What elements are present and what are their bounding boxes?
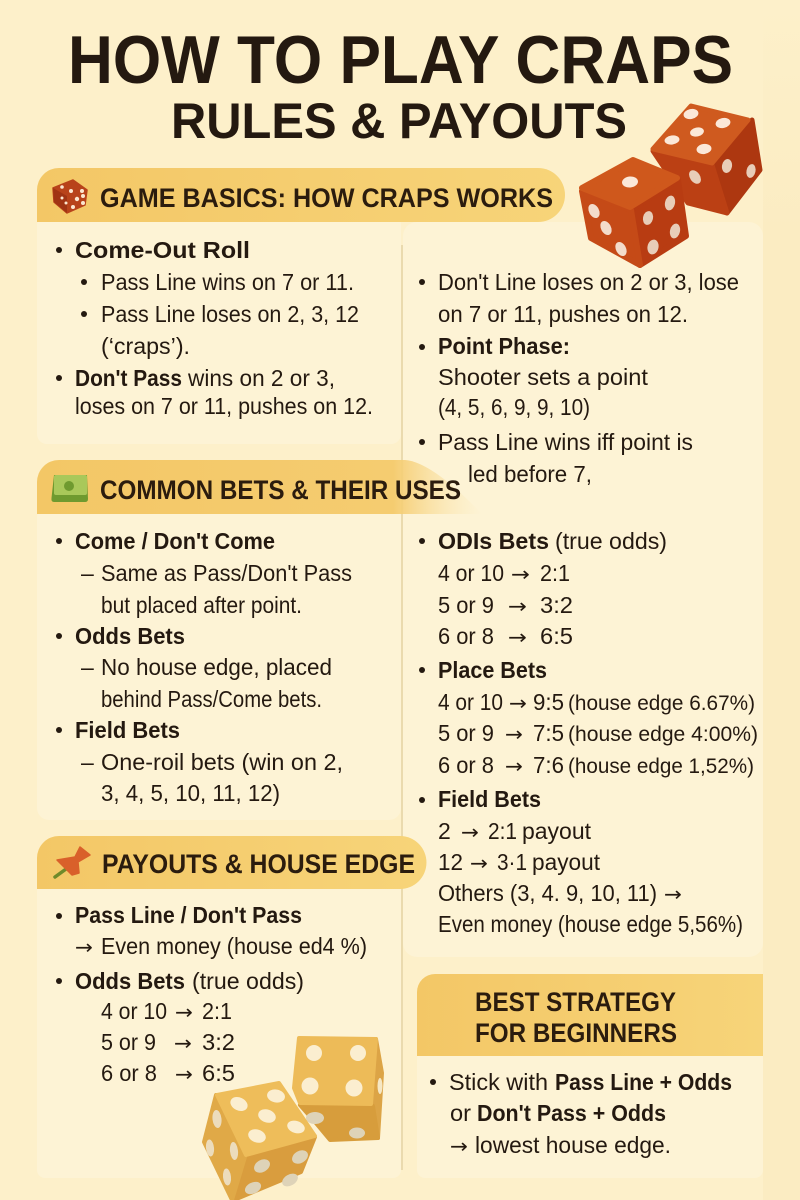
panel: common bets left column: – (81, 749, 94, 775)
header: common bets (37, 460, 482, 514)
panel: right column: 12 (438, 849, 463, 875)
strategy heading: BEST STRATEGY (475, 987, 676, 1017)
panel: game basics left column (37, 215, 401, 444)
icon: push pin (55, 847, 90, 877)
panel: right column: (house edge 1,52%) (568, 755, 754, 778)
panel: right column: Others (3, 4. 9, 10, 11) (438, 880, 657, 906)
icon: money stack (51, 475, 88, 502)
panel: right column: 6 or 8 (438, 752, 494, 778)
panel: payouts left column: → (174, 1031, 192, 1055)
panel: right column: Pass Line wins iff point is (438, 429, 693, 455)
panel: common bets left column: Same as Pass/Don't Pass (101, 560, 352, 586)
panel: payouts left column: 6 or 8 (101, 1060, 157, 1086)
panel: common bets left column: One-roil bets (win on 2, (101, 749, 343, 775)
panel: game basics left column: (‘craps’). (101, 333, 190, 359)
panel: right column: → (508, 625, 527, 649)
column divider (401, 245, 403, 1170)
panel: common bets left column: – (81, 560, 94, 586)
strategy text: Don't Pass + Odds (477, 1100, 666, 1126)
header: game basics: GAME BASICS: HOW CRAPS WORKS (100, 183, 553, 213)
panel: right column: 5 or 9 (438, 720, 494, 746)
panel: right column: 2 (438, 818, 451, 844)
panel: right column: → (505, 754, 523, 778)
header: payouts and house edge (37, 836, 426, 889)
panel: payouts left column: 3:2 (202, 1029, 235, 1055)
panel: right column: → (511, 562, 530, 586)
strategy text: lowest house edge. (475, 1132, 671, 1158)
panel: common bets left column: but placed after point. (101, 592, 302, 618)
panel: payouts left column: 5 or 9 (101, 1029, 156, 1055)
panel: right column: 2:1 (540, 560, 570, 586)
panel: common bets left column: No house edge, placed (101, 654, 332, 680)
panel: payouts left column: Pass Line / Don't Pass (75, 902, 302, 928)
panel: game basics left column: wins on 2 or 3, (187, 365, 335, 391)
red rear die (653, 106, 760, 213)
panel: right column: 4 or 10 (438, 689, 503, 715)
panel: game basics left column: Come-Out Roll (75, 237, 250, 263)
icon: gold dice (204, 1038, 382, 1200)
panel: right column: 7:6 (533, 752, 564, 778)
strategy heading: FOR BEGINNERS (475, 1018, 677, 1048)
panel: right column: ODIs Bets (438, 528, 549, 554)
panel: payouts left column: Odds Bets (75, 968, 185, 994)
panel: game basics left column: loses on 7 or 11, pushes on 12. (75, 393, 373, 419)
panel: right column: 7:5 (533, 720, 564, 746)
header: common bets: COMMON BETS & THEIR USES (100, 475, 461, 505)
title: RULES & PAYOUTS (171, 93, 627, 149)
strategy text (430, 1069, 732, 1158)
panel: game basics left column: Pass Line wins on 7 or 11. (101, 269, 354, 295)
panel: right column: 3·1 (497, 849, 527, 875)
title (68, 22, 733, 149)
panel: game basics left column: Pass Line loses on 2, 3, 12 (101, 301, 359, 327)
panel: right column: (house edge 4:00%) (568, 723, 758, 746)
panel: payouts left column: 6:5 (202, 1060, 235, 1086)
header: game basics (37, 168, 565, 222)
gold front die (204, 1083, 315, 1200)
panel: right column: → (508, 594, 527, 618)
panel: right column: 4 or 10 (438, 560, 504, 586)
panel: right column: (4, 5, 6, 9, 9, 10) (438, 394, 590, 420)
panel: right column: Place Bets (438, 657, 547, 683)
panel: best strategy for beginners (417, 974, 763, 1178)
panel: right column: Field Bets (438, 786, 541, 812)
red front die (582, 160, 686, 265)
panel: right column: payout (532, 849, 601, 875)
panel: right column: 2:1 (488, 818, 517, 844)
panel: payouts left column: → (175, 1062, 193, 1086)
panel: common bets left column: behind Pass/Come bets. (101, 686, 322, 712)
panel: right column (403, 222, 763, 957)
panel: right column: on 7 or 11, pushes on 12. (438, 301, 688, 327)
strategy text: Pass Line + Odds (555, 1069, 732, 1095)
panel: right column: (true odds) (555, 528, 667, 554)
icon: small die (53, 180, 87, 213)
panel: game basics left column: Don't Pass (75, 365, 182, 391)
panel: right column: Don't Line loses on 2 or 3, lose (438, 269, 739, 295)
panel: common bets left column: Field Bets (75, 717, 180, 743)
panel: payouts left column: → (75, 935, 93, 959)
panel: payouts left column: Even money (house ed4 %) (101, 933, 367, 959)
panel: common bets left column (37, 505, 401, 820)
panel: right column: 9:5 (533, 689, 564, 715)
panel: common bets left column: – (81, 654, 94, 680)
icon: red dice (582, 106, 760, 265)
panel: right column: → (470, 851, 488, 875)
panel: right column: 5 or 9 (438, 592, 494, 618)
panel: right column: → (505, 722, 523, 746)
strategy text: Stick with (449, 1069, 548, 1095)
panel: right column: 3:2 (540, 592, 573, 618)
panel: payouts left column: → (175, 1000, 193, 1024)
panel: right column: 6:5 (540, 623, 573, 649)
panel: right column: → (509, 691, 527, 715)
panel: common bets left column: Come / Don't Come (75, 528, 275, 554)
title: HOW TO PLAY CRAPS (68, 22, 733, 98)
panel: right column: Shooter sets a point (438, 364, 649, 390)
panel: right column: 6 or 8 (438, 623, 494, 649)
panel: payouts left column (37, 880, 401, 1178)
panel: right column: Point Phase: (438, 333, 570, 359)
panel: payouts left column: (true odds) (192, 968, 304, 994)
panel: common bets left column: Odds Bets (75, 623, 185, 649)
gold rear die (294, 1038, 382, 1140)
panel: right column: payout (522, 818, 592, 844)
panel: right column: → (461, 820, 479, 844)
strategy heading (475, 987, 677, 1048)
header: payouts and house edge: PAYOUTS & HOUSE EDGE (102, 849, 415, 879)
panel: right column: led before 7, (468, 461, 592, 487)
panel: right column: (house edge 6.67%) (568, 692, 755, 715)
panel: right column: → (664, 882, 682, 906)
panel: right column: Even money (house edge 5,56%) (438, 911, 743, 937)
strategy text: or (450, 1100, 471, 1126)
strategy text: → (450, 1134, 468, 1158)
panel: payouts left column: 4 or 10 (101, 998, 167, 1024)
panel: common bets left column: 3, 4, 5, 10, 11, 12) (101, 780, 280, 806)
panel: payouts left column: 2:1 (202, 998, 232, 1024)
